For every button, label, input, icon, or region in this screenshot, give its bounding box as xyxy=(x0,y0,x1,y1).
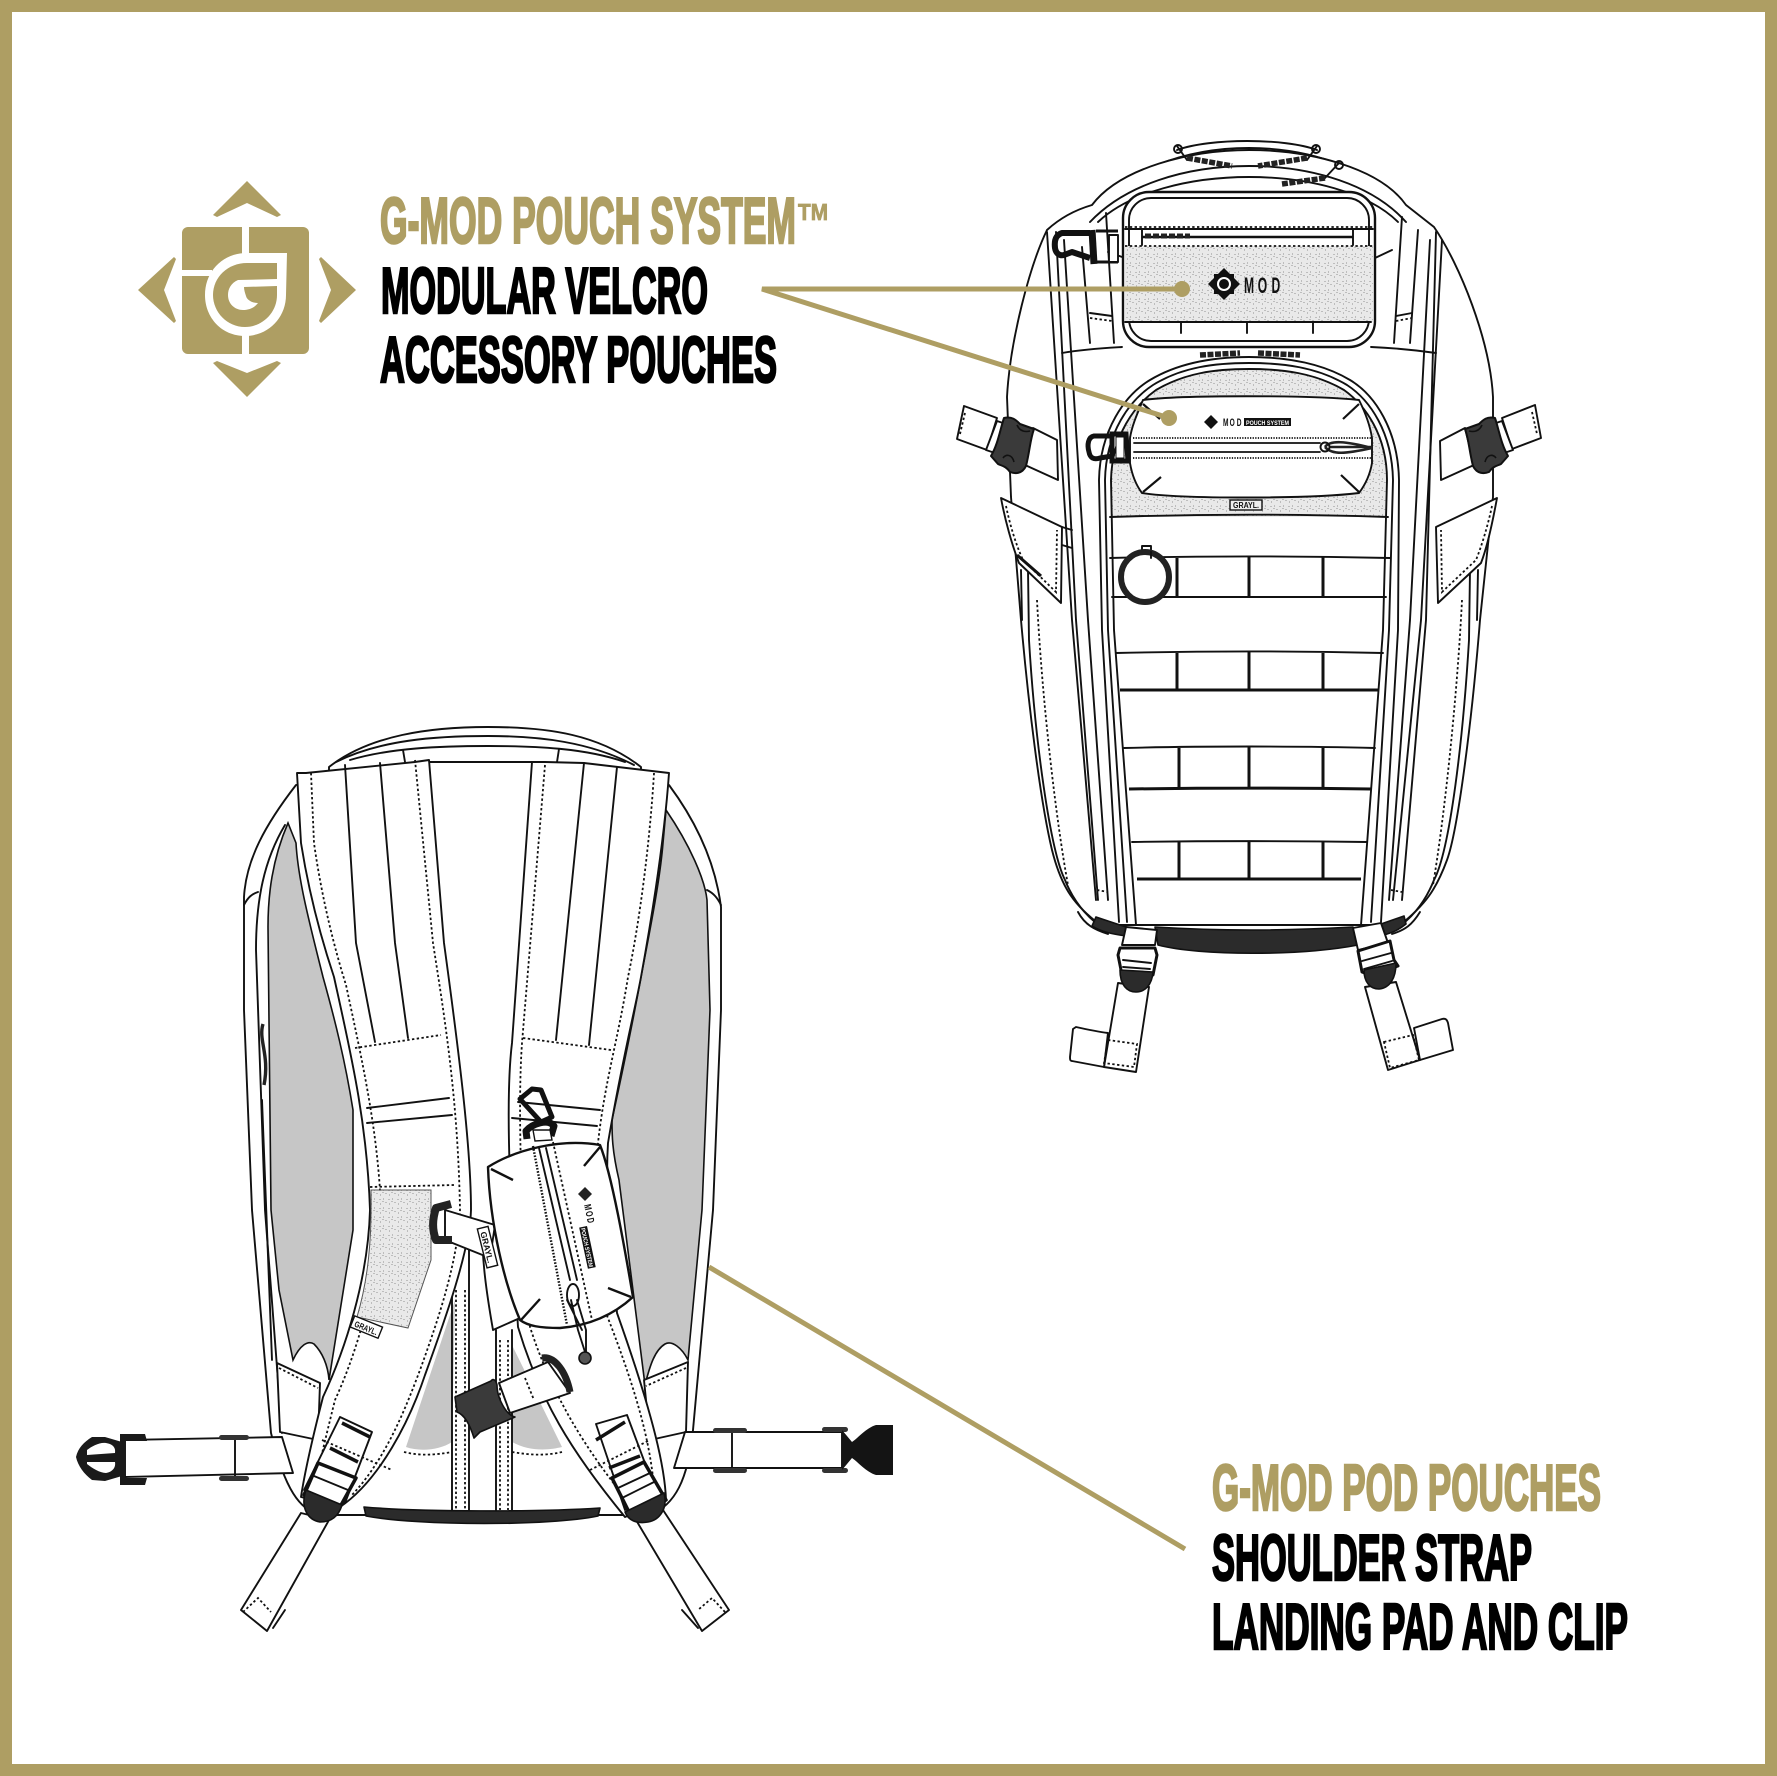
left body seams xyxy=(244,825,721,1433)
top pouch xyxy=(1123,192,1375,347)
left mesh panel xyxy=(268,823,353,1380)
callout line to pouches xyxy=(762,281,1190,426)
front lower pocket xyxy=(1130,396,1372,498)
left side buckle xyxy=(957,406,1058,480)
left waist buckle xyxy=(76,1434,147,1485)
handle and top arcs xyxy=(1087,141,1408,215)
upper rungs beside pouch xyxy=(1082,213,1418,343)
MOLLE webbing rows xyxy=(1110,515,1390,879)
left side pocket flap xyxy=(1001,498,1072,603)
lower right strap xyxy=(636,1510,729,1631)
zipper pull xyxy=(1145,234,1190,238)
right side pocket seams xyxy=(1394,570,1478,930)
lower pocket hook xyxy=(1088,434,1128,461)
body outline xyxy=(1007,150,1493,925)
waist strap right xyxy=(674,1425,893,1475)
side zipper pull xyxy=(262,1024,266,1085)
back backpack illustration xyxy=(76,727,893,1631)
back top arcs xyxy=(329,727,641,790)
pod zipper pull xyxy=(567,1284,591,1364)
right shoulder strap xyxy=(509,762,669,1517)
left lower strap and buckle xyxy=(1070,927,1157,1072)
left velcro landing pad xyxy=(357,1190,431,1328)
lumbar dark band xyxy=(364,1507,600,1524)
heading: G-MOD pouch system xyxy=(380,184,828,257)
left strap GRAYL tag xyxy=(350,1316,383,1338)
icon: G-MOD logo xyxy=(138,181,356,397)
pod pouch xyxy=(488,1142,633,1328)
callout dot top pouch xyxy=(1174,281,1190,297)
callout line to pod pouches xyxy=(709,1267,1185,1549)
left pouch hook xyxy=(1055,230,1118,264)
pod GRAYL tag xyxy=(477,1226,498,1268)
front backpack illustration xyxy=(957,141,1541,1072)
pod label: MOD xyxy=(582,1203,597,1224)
left channels xyxy=(1047,232,1108,900)
pouch label MOD: MOD xyxy=(1244,273,1280,298)
bottom dark band xyxy=(1078,912,1420,953)
pocket label: MOD xyxy=(1223,416,1242,428)
left strap adjuster xyxy=(304,1417,392,1522)
pod mini logo xyxy=(578,1187,592,1201)
text block: shoulder strap landing pad and clip xyxy=(1212,1521,1628,1663)
velcro arch panel xyxy=(1111,369,1387,517)
label bar xyxy=(1244,418,1291,427)
text block: modular velcro accessory pouches: MODULAR VELCRO xyxy=(381,254,708,327)
right side pocket flap xyxy=(1436,498,1497,603)
chest buckle and strap xyxy=(455,1358,570,1438)
left side pocket seams xyxy=(1021,570,1106,930)
heading: G-MOD pouch system: TM xyxy=(798,199,828,225)
GRAYL tag: GRAYL. xyxy=(1233,501,1259,510)
icon: mini logo xyxy=(1208,268,1240,300)
pod GRAYL tag: GRAYL. xyxy=(478,1231,496,1264)
front panel arches xyxy=(1099,357,1399,925)
left shoulder strap xyxy=(297,760,471,1507)
hip wings xyxy=(277,1362,688,1440)
lower left strap xyxy=(241,1513,329,1631)
right channels xyxy=(1389,232,1442,900)
pod hook xyxy=(520,1089,554,1141)
back body outline xyxy=(244,762,721,1515)
pod label bar: POUCH SYSTEM xyxy=(579,1227,593,1268)
left strap GRAYL tag: GRAYL. xyxy=(353,1319,379,1337)
center tab below pod xyxy=(482,1225,520,1330)
waist strap left xyxy=(76,1434,293,1485)
center spine columns xyxy=(452,1200,512,1510)
top zip pulls xyxy=(1174,145,1343,355)
upper body arcs xyxy=(1062,166,1436,353)
right side buckle xyxy=(1440,405,1541,480)
metal ring xyxy=(1121,546,1169,602)
left strap slider and webbing xyxy=(433,1204,495,1258)
hip mesh windows xyxy=(404,1300,562,1455)
label bar: POUCH SYSTEM xyxy=(1246,420,1289,427)
right waist buckle xyxy=(842,1425,893,1475)
heading: G-MOD pouch system: G-MOD POUCH SYSTEM xyxy=(380,184,796,257)
right mesh panel xyxy=(612,810,710,1385)
text block: modular velcro accessory pouches: ACCESSORY POUCHES xyxy=(380,323,777,396)
text block: modular velcro accessory pouches xyxy=(380,254,777,396)
right lower strap and buckle xyxy=(1353,923,1453,1070)
right strap adjuster xyxy=(590,1415,666,1523)
mini logo xyxy=(1204,415,1218,429)
